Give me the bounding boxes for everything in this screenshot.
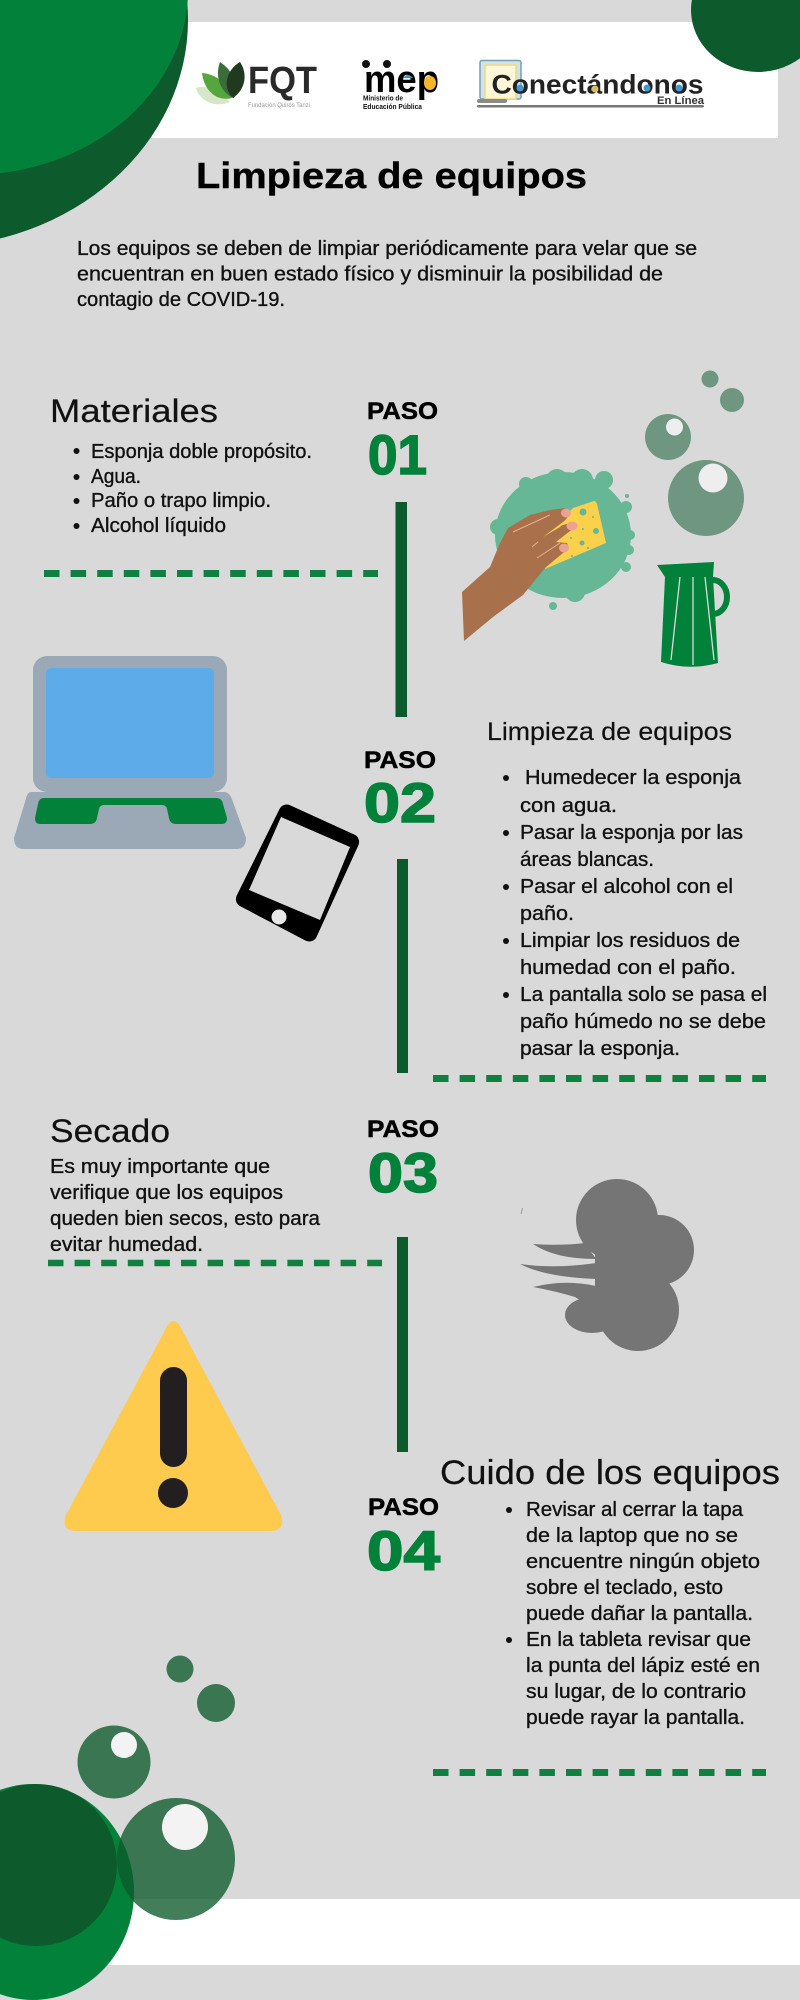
heading: Materiales: Materiales <box>50 393 218 429</box>
list: materials: Agua. <box>91 466 141 488</box>
label: paso 03: PASO <box>367 1116 439 1143</box>
label: paso 04: PASO <box>368 1494 439 1521</box>
decorative bubbles bottom <box>78 1656 235 1920</box>
panel: step 4 cuidado <box>440 1454 780 1729</box>
footer white band <box>0 1899 800 1965</box>
list: cleaning steps: áreas blancas. <box>520 849 654 871</box>
divider: step 1 dashes <box>44 570 378 577</box>
heading: Limpieza de equipos: Limpieza de equipos <box>487 718 732 746</box>
text: secado description: verifique que los equipos <box>50 1182 283 1204</box>
icon: air blast cloud <box>520 1179 694 1351</box>
label: paso 04: 04 <box>367 1519 440 1582</box>
label: paso 04 <box>367 1494 440 1582</box>
list: care tips: la punta del lápiz esté en <box>526 1655 760 1677</box>
label: paso 03 <box>367 1116 439 1204</box>
list: care tips <box>506 1499 760 1729</box>
logo: FQT: Fundación Quirós Tanzi <box>248 102 310 109</box>
list: care tips: encuentre ningún objeto <box>526 1551 760 1573</box>
label: paso 01: 01 <box>368 423 427 486</box>
label: paso 01: PASO <box>367 398 438 425</box>
logo: Conectándonos En Línea: En Línea <box>657 95 705 107</box>
list: care tips: En la tableta revisar que <box>526 1629 751 1651</box>
list: cleaning steps: pasar la esponja. <box>520 1038 680 1060</box>
panel: step 3 secado <box>50 1113 321 1256</box>
list: cleaning steps: humedad con el paño. <box>520 957 736 979</box>
divider: step 3 dashes <box>48 1260 382 1266</box>
list: care tips: Revisar al cerrar la tapa <box>526 1499 744 1521</box>
intro paragraph <box>77 238 697 311</box>
list: materials: Esponja doble propósito. <box>91 441 312 463</box>
icon: water jug <box>657 562 727 667</box>
icon: soap bubbles <box>645 370 744 536</box>
label: paso 02: PASO <box>364 747 436 774</box>
top-right corner circle <box>691 0 800 72</box>
logo: MEP: Educación Pública <box>363 102 423 111</box>
heading: Secado: Secado <box>50 1113 170 1149</box>
icon: laptop <box>14 656 246 849</box>
list: cleaning steps: paño. <box>520 903 574 925</box>
label: paso 02: 02 <box>364 771 436 834</box>
list: cleaning steps: Humedecer la esponja <box>525 767 742 789</box>
intro paragraph: encuentran en buen estado físico y disminuir la posibilidad de <box>77 264 663 286</box>
text: secado description: queden bien secos, esto para <box>50 1208 321 1230</box>
panel: step 2 limpieza <box>487 718 767 1060</box>
top-left corner circles <box>0 0 188 247</box>
panel: step 1 materiales <box>50 393 312 537</box>
text: secado description: evitar humedad. <box>50 1234 203 1256</box>
list: cleaning steps: paño húmedo no se debe <box>520 1011 766 1033</box>
text: secado description <box>50 1156 321 1256</box>
list: care tips: sobre el teclado, esto <box>526 1577 723 1599</box>
divider: step 4 dashes <box>433 1769 766 1776</box>
list: cleaning steps: Pasar la esponja por las <box>520 822 743 844</box>
header logo banner <box>140 22 778 138</box>
label: paso 02 <box>364 747 436 834</box>
logo: MEP: Ministerio de <box>363 94 403 102</box>
logo: Conectándonos En Línea <box>477 60 705 108</box>
timeline bar 2 <box>397 859 408 1073</box>
list: materials: Paño o trapo limpio. <box>91 490 271 512</box>
label: paso 01 <box>367 398 438 486</box>
logo: Conectándonos En Línea: Conectándonos <box>492 70 704 100</box>
heading: Cuido de los equipos: Cuido de los equipos <box>440 1454 780 1492</box>
list: materials: Alcohol líquido <box>91 515 226 537</box>
timeline bar 3 <box>397 1237 408 1452</box>
title: Limpieza de equipos <box>196 155 587 196</box>
list: cleaning steps <box>503 767 767 1060</box>
logo: FQT <box>196 60 317 109</box>
list: cleaning steps: Limpiar los residuos de <box>520 930 740 952</box>
list: materials <box>74 441 312 537</box>
list: care tips: su lugar, de lo contrario <box>526 1681 746 1703</box>
icon: tablet <box>244 812 351 934</box>
icon: hand cleaning with sponge <box>462 469 635 641</box>
list: cleaning steps: Pasar el alcohol con el <box>520 876 733 898</box>
bottom-left corner circles <box>0 1784 134 2000</box>
icon: warning triangle <box>64 1321 282 1531</box>
list: cleaning steps: La pantalla solo se pasa el <box>520 984 767 1006</box>
list: care tips: de la laptop que no se <box>526 1525 738 1547</box>
intro paragraph: Los equipos se deben de limpiar periódicamente para velar que se <box>77 238 697 260</box>
logo: FQT: FQT <box>248 60 317 102</box>
label: paso 03: 03 <box>368 1141 438 1204</box>
list: care tips: puede rayar la pantalla. <box>526 1707 745 1729</box>
list: cleaning steps: con agua. <box>520 795 617 817</box>
intro paragraph: contagio de COVID-19. <box>77 289 285 311</box>
divider: step 2 dashes <box>433 1075 766 1082</box>
list: care tips: puede dañar la pantalla. <box>526 1603 753 1625</box>
text: secado description: Es muy importante que <box>50 1156 270 1178</box>
timeline bar 1 <box>396 502 407 717</box>
logo: MEP: mep <box>364 59 439 101</box>
